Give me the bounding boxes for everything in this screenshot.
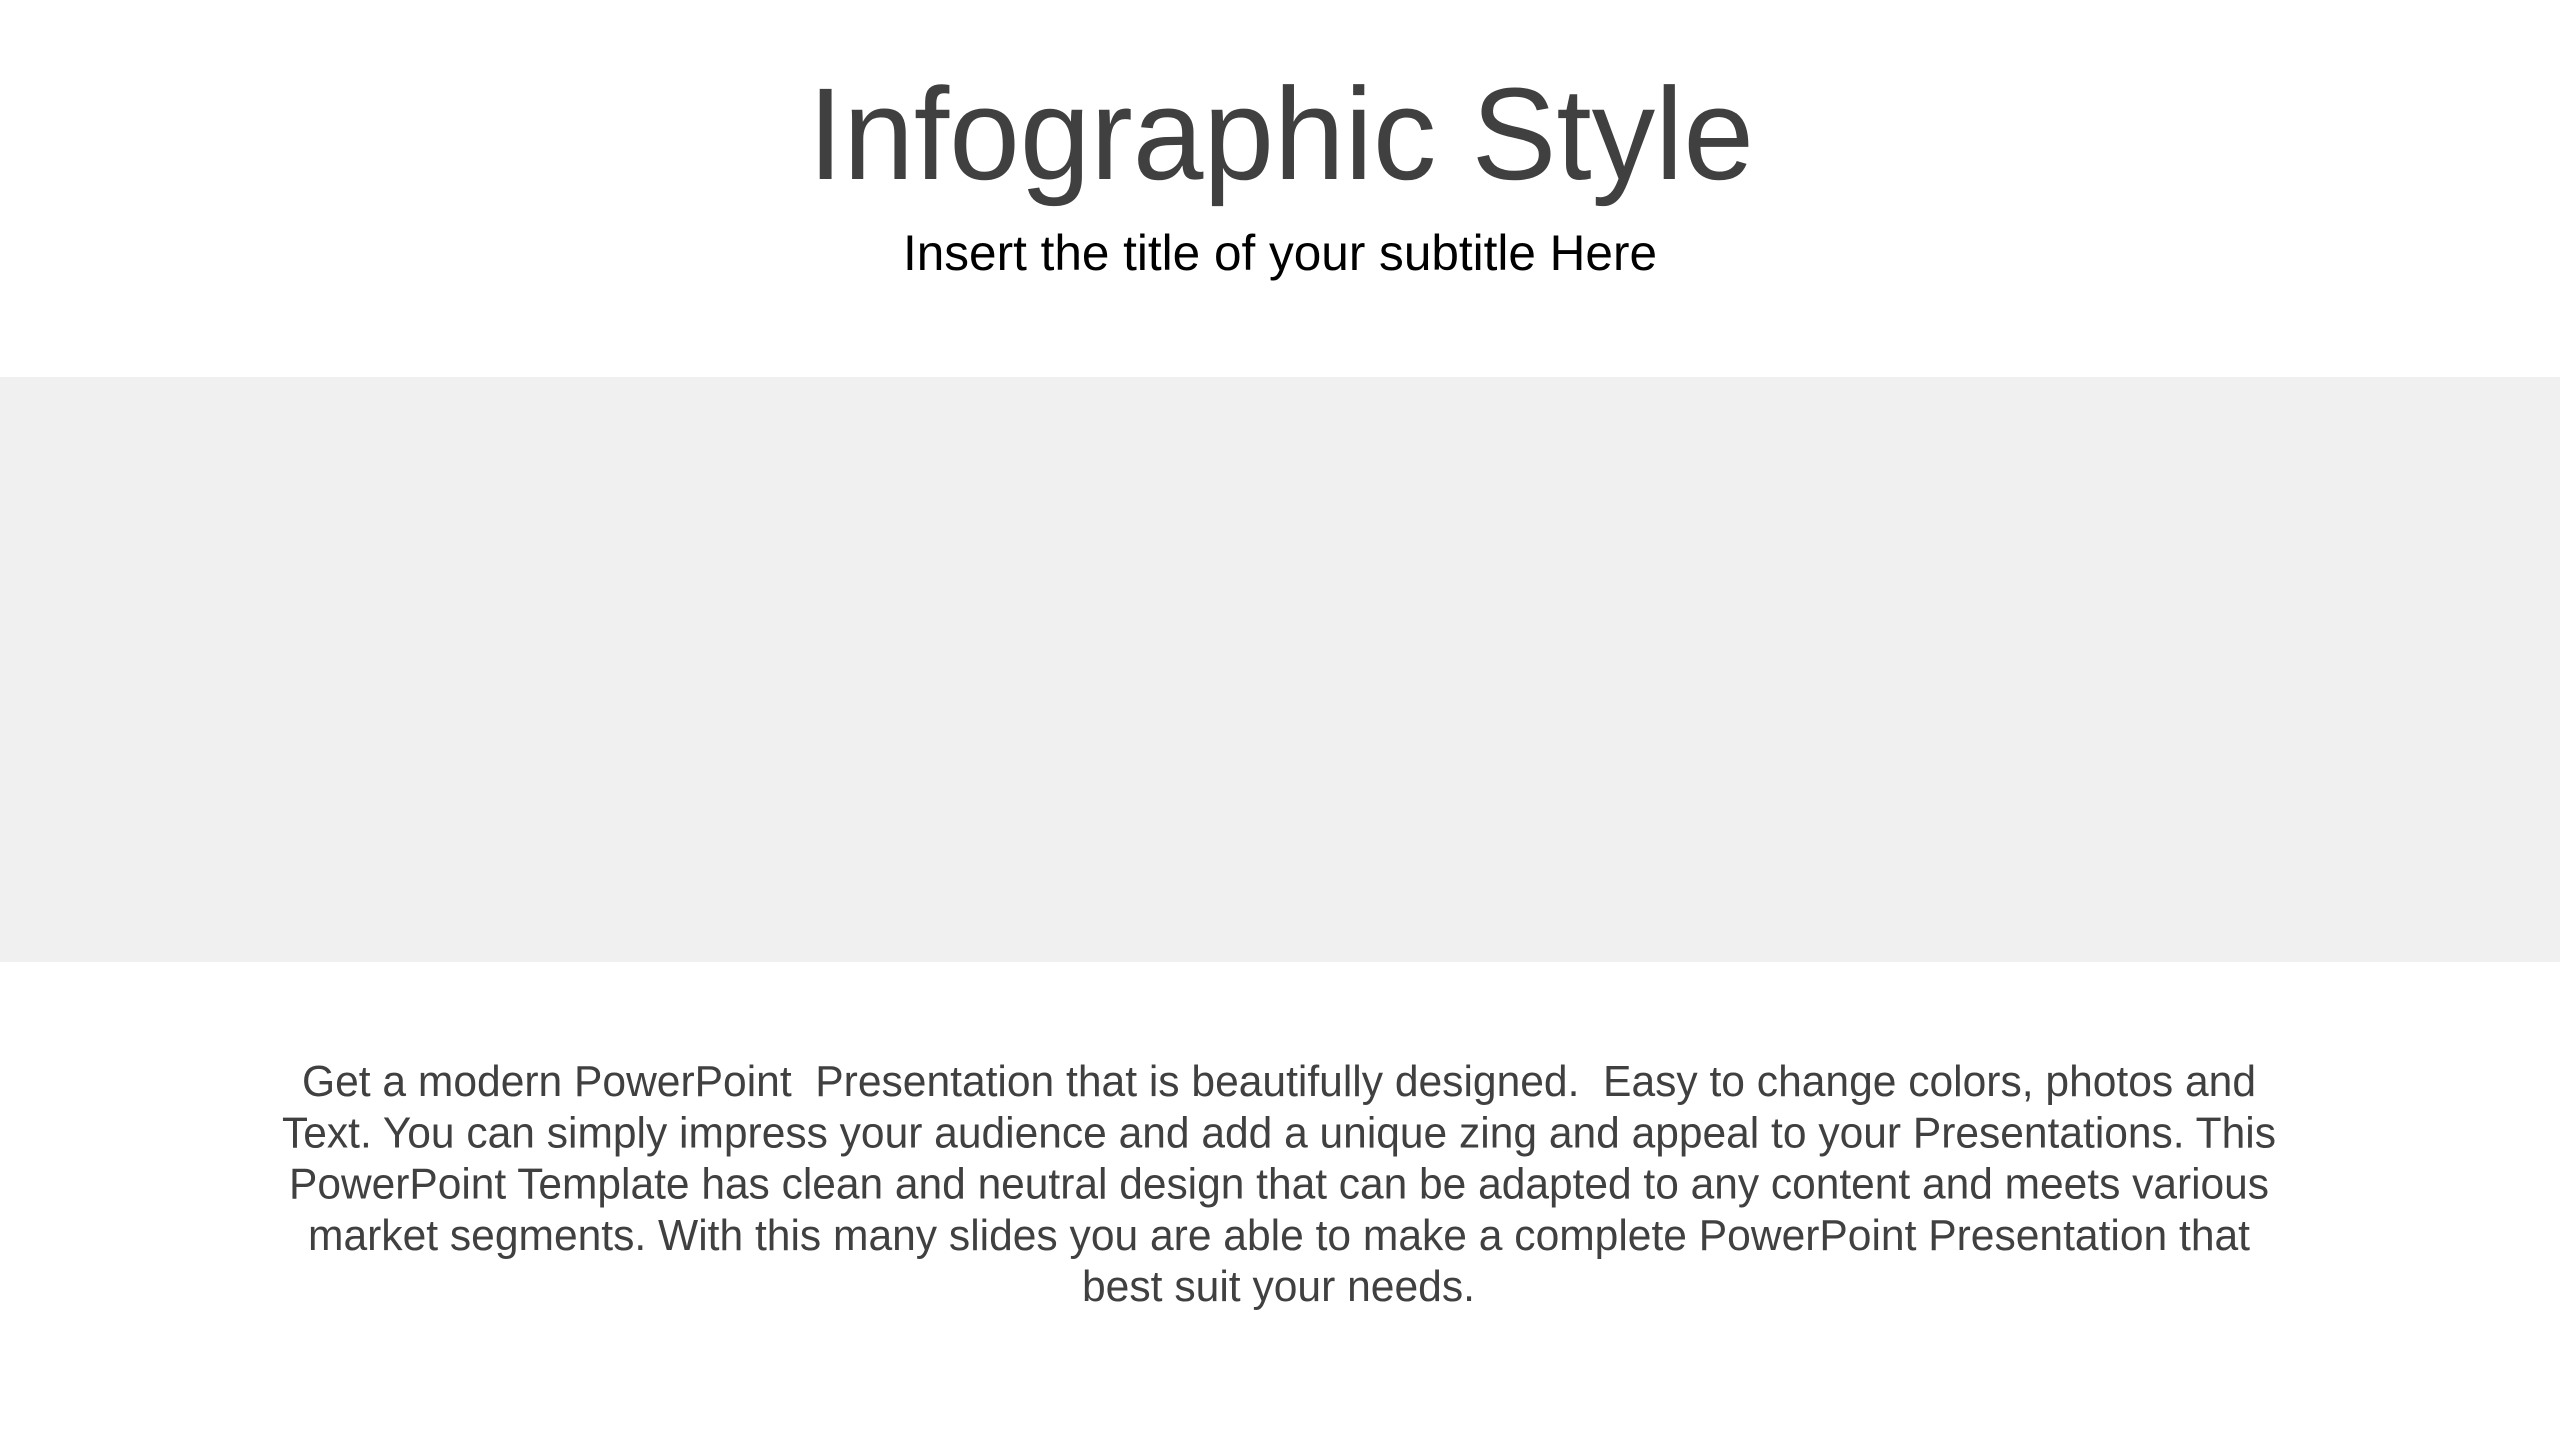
title: Infographic Style [808, 60, 1754, 207]
text block: description paragraph: PowerPoint Template has clean and neutral design that can be adapted to any content and meets various [289, 1160, 2269, 1208]
text block: description paragraph [282, 1057, 2276, 1311]
text block: description paragraph: best suit your needs. [1082, 1262, 1475, 1311]
text block: description paragraph: market segments. With this many slides you are able to make a complete PowerPoint Presentation that [308, 1211, 2250, 1260]
panel: empty grey band [0, 377, 2560, 962]
text block: description paragraph: Text. You can simply impress your audience and add a unique zing and appeal to your Presentations. This [282, 1108, 2276, 1158]
subtitle: Insert the title of your subtitle Here [903, 225, 1657, 281]
text block: description paragraph: Get a modern PowerPoint Presentation that is beautifully designed. Easy to change colors, photos and [302, 1057, 2256, 1106]
